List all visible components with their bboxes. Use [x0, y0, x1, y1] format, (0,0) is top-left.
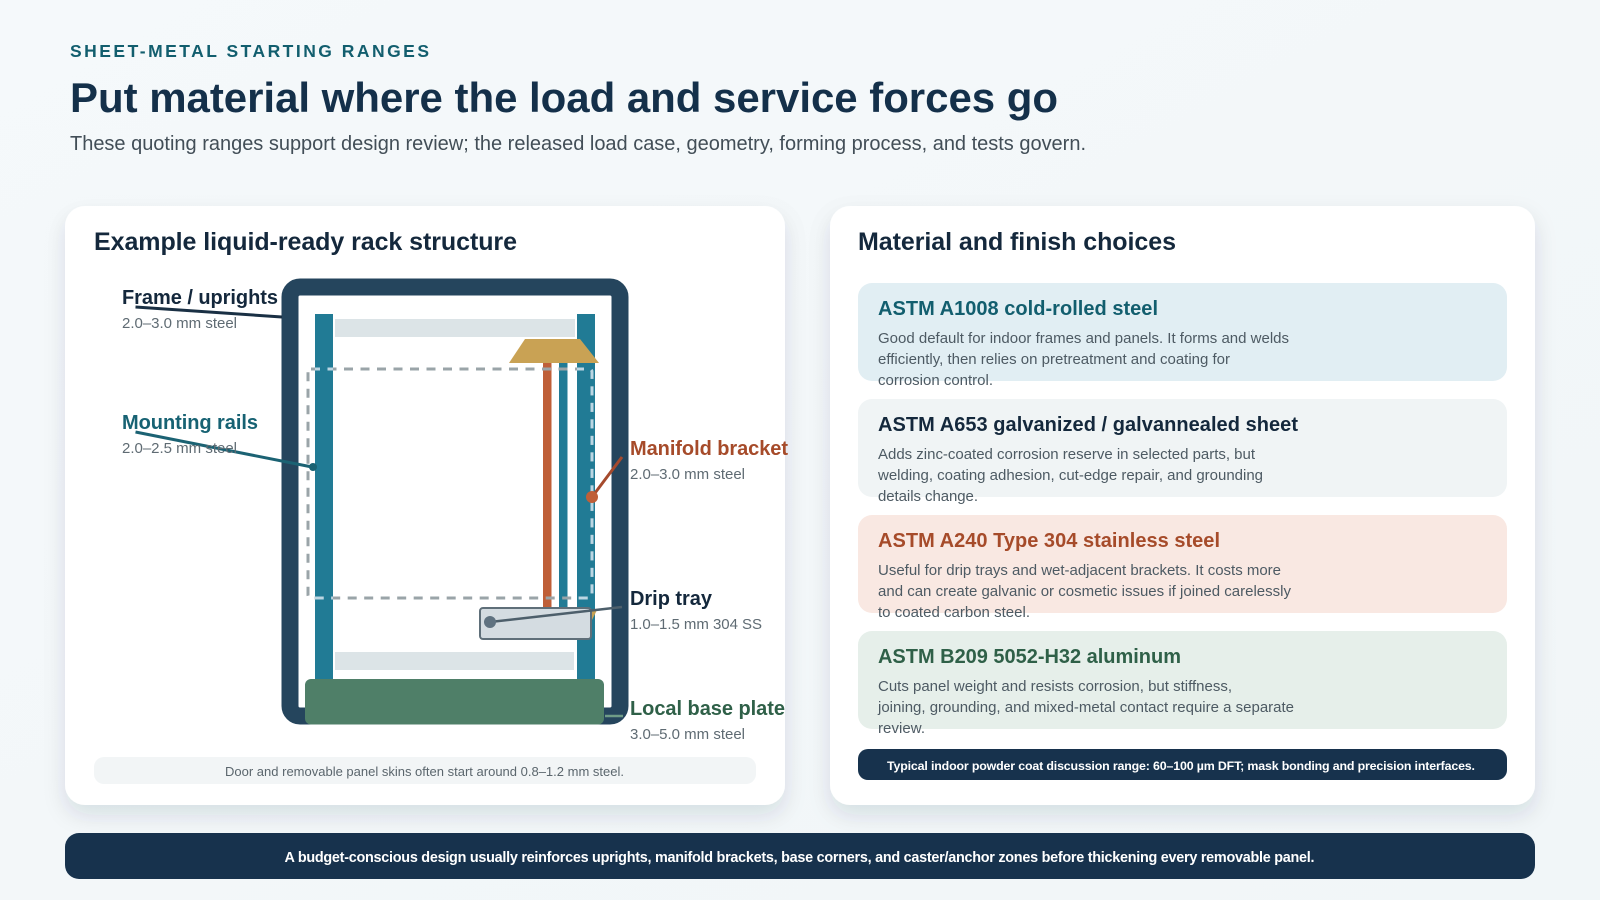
- label: drip tray: Drip tray: [630, 588, 713, 610]
- top panel: [335, 319, 575, 337]
- note: panel skins: Door and removable panel skins often start around 0.8–1.2 mm steel.: [225, 764, 624, 779]
- card: A1008: efficiently, then relies on pretreatment and coating for: [878, 351, 1230, 368]
- drip tray: [480, 608, 591, 639]
- card: A653: welding, coating adhesion, cut-edge repair, and grounding: [877, 467, 1263, 484]
- label: mounting rails: Mounting rails: [122, 412, 258, 434]
- leader: frame: [136, 307, 282, 317]
- label: mounting rails: 2.0–2.5 mm steel: [122, 440, 237, 457]
- panel heading: materials: Material and finish choices: [858, 228, 1176, 256]
- card: A240: Useful for drip trays and wet-adjacent brackets. It costs more: [878, 562, 1281, 579]
- card: B209: ASTM B209 5052-H32 aluminum: [878, 646, 1181, 668]
- label: local base plate: Local base plate: [630, 698, 785, 720]
- card: B209: joining, grounding, and mixed-metal contact require a separate: [877, 699, 1294, 716]
- manifold bracket bar: [543, 363, 552, 609]
- card: B209: review.: [878, 720, 925, 737]
- leader: drip tray: [484, 607, 622, 628]
- card: A1008: corrosion control.: [878, 372, 993, 389]
- label: manifold bracket: Manifold bracket: [630, 438, 788, 460]
- diagram: rack: [136, 287, 623, 724]
- subtitle: These quoting ranges support design review; the released load case, geometry, forming process, and tests govern.: [70, 133, 1086, 155]
- label: local base plate: [630, 698, 785, 743]
- card: A653: Adds zinc-coated corrosion reserve in selected parts, but: [878, 446, 1256, 463]
- bottom takeaway bar: A budget-conscious design usually reinforces uprights, manifold brackets, base corners, and caster/anchor zones before thickening every removable panel.: [284, 850, 1314, 866]
- header: [70, 41, 1086, 155]
- right mounting rail: [577, 314, 595, 680]
- card: A653: details change.: [878, 488, 978, 505]
- label: drip tray: [630, 588, 762, 633]
- gold manifold cap: [509, 339, 599, 363]
- label: manifold bracket: [630, 438, 788, 483]
- label: frame / uprights: 2.0–3.0 mm steel: [122, 315, 237, 332]
- card: A1008: [858, 283, 1507, 389]
- service envelope dashed: [308, 369, 592, 598]
- label: manifold bracket: 2.0–3.0 mm steel: [630, 466, 745, 483]
- card: B209: [858, 631, 1507, 737]
- card: A1008: Good default for indoor frames and panels. It forms and welds: [878, 330, 1289, 347]
- card: B209: Cuts panel weight and resists corrosion, but stiffness,: [878, 678, 1232, 695]
- panel: rack structure: [65, 206, 788, 805]
- card: A653: [858, 399, 1507, 505]
- leader: mounting rails: [136, 432, 317, 471]
- rack frame: [290, 287, 620, 716]
- powder coat note: Typical indoor powder coat discussion range: 60–100 µm DFT; mask bonding and precision interfaces.: [887, 759, 1475, 773]
- label: drip tray: 1.0–1.5 mm 304 SS: [630, 616, 762, 633]
- leader: base plate: [605, 715, 623, 717]
- powder coat note: [858, 749, 1507, 780]
- label: local base plate: 3.0–5.0 mm steel: [630, 726, 745, 743]
- card: A1008: ASTM A1008 cold-rolled steel: [878, 298, 1158, 320]
- note: panel skins: [94, 757, 756, 784]
- bottom panel: [335, 652, 574, 670]
- base plate: [305, 679, 604, 724]
- inner teal bar: [559, 363, 568, 609]
- card: A240: to coated carbon steel.: [878, 604, 1030, 621]
- card: A653: ASTM A653 galvanized / galvannealed sheet: [878, 414, 1298, 436]
- leader: manifold bracket: [586, 457, 622, 503]
- card: A240: [858, 515, 1507, 621]
- gold tab: [591, 610, 597, 620]
- label: frame / uprights: [122, 287, 278, 332]
- title: Put material where the load and service forces go: [70, 74, 1058, 121]
- label: mounting rails: [122, 412, 258, 457]
- eyebrow: SHEET-METAL STARTING RANGES: [70, 41, 429, 61]
- card: A240: ASTM A240 Type 304 stainless steel: [878, 530, 1220, 552]
- panel: material choices: [830, 206, 1535, 805]
- label: frame / uprights: Frame / uprights: [122, 287, 278, 309]
- left mounting rail: [315, 314, 333, 680]
- card: A240: and can create galvanic or cosmetic issues if joined carelessly: [878, 583, 1292, 600]
- panel heading: rack structure: Example liquid-ready rack structure: [94, 228, 517, 256]
- bottom takeaway bar: [65, 833, 1535, 879]
